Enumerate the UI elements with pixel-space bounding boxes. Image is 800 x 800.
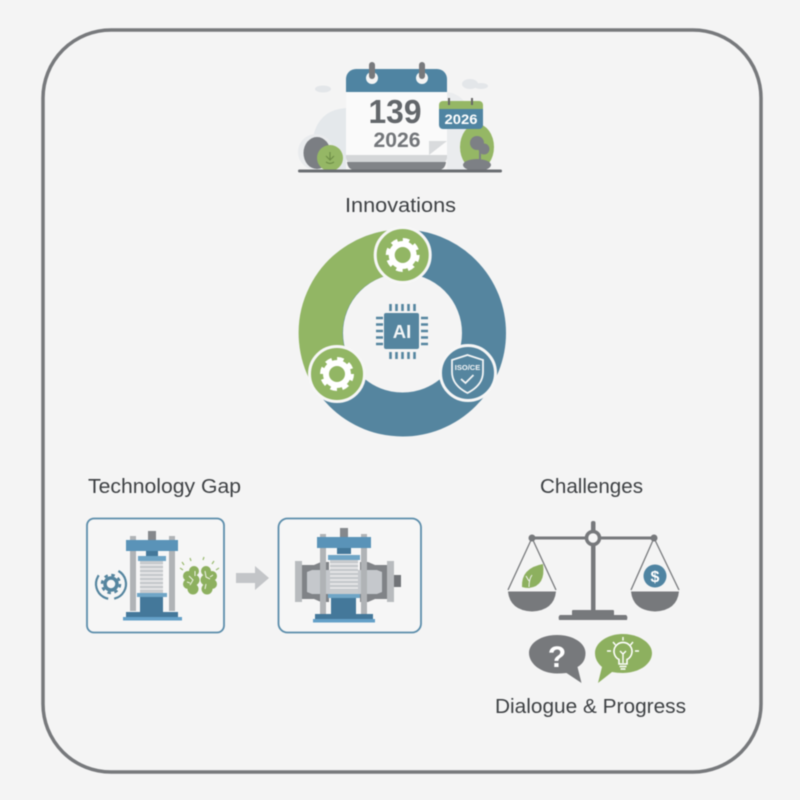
chart: innovations ring <box>310 228 496 414</box>
icon: ISO/CE shield badge: ISO/CE <box>455 363 480 372</box>
heading: Technology Gap: Technology Gap <box>88 476 241 498</box>
calendar number 139: 139 <box>368 93 422 130</box>
icon: gear cycle <box>91 564 131 604</box>
icon: calendar scene <box>298 62 502 172</box>
icon: AI chip <box>376 304 428 359</box>
arrow: gap to upgraded press <box>236 566 269 590</box>
icon: lower-left gear badge <box>310 346 364 402</box>
ring segment: blue <box>321 252 484 414</box>
icon: balance scale <box>508 521 679 620</box>
icon: press machine <box>313 528 375 622</box>
icon: press machine <box>123 531 182 620</box>
icon: top gear badge <box>375 228 430 282</box>
gray housing <box>295 561 401 602</box>
panel: upgraded press <box>278 518 421 632</box>
panel border <box>87 518 224 632</box>
heading: Innovations: Innovations <box>345 195 456 217</box>
scale post and beam <box>528 521 658 620</box>
icon: question speech bubble: ? <box>548 641 566 674</box>
calendar page <box>346 62 447 170</box>
icon: idea speech bubble <box>595 634 652 683</box>
right pan with dollar: $ <box>651 569 660 586</box>
heading: Challenges: Challenges <box>540 476 643 498</box>
icon: AI chip: AI <box>393 321 411 342</box>
icon: green brain <box>180 557 219 594</box>
panel border <box>278 518 421 632</box>
calendar year 2026: 2026 <box>374 129 420 152</box>
ground line <box>298 170 502 172</box>
left pan with leaf <box>508 538 556 612</box>
right tree <box>460 124 494 171</box>
mini calendar badge: 2026 <box>444 111 478 127</box>
right pan with dollar <box>631 538 679 612</box>
ring segment: green <box>321 251 403 382</box>
icon: question speech bubble <box>529 635 586 683</box>
icon: ISO/CE shield badge <box>440 346 496 400</box>
mini calendar badge <box>439 98 483 129</box>
background clouds and hills <box>298 79 488 170</box>
left bushes <box>304 137 343 171</box>
panel: current press <box>87 518 224 632</box>
heading: Dialogue & Progress: Dialogue & Progress <box>495 696 686 718</box>
